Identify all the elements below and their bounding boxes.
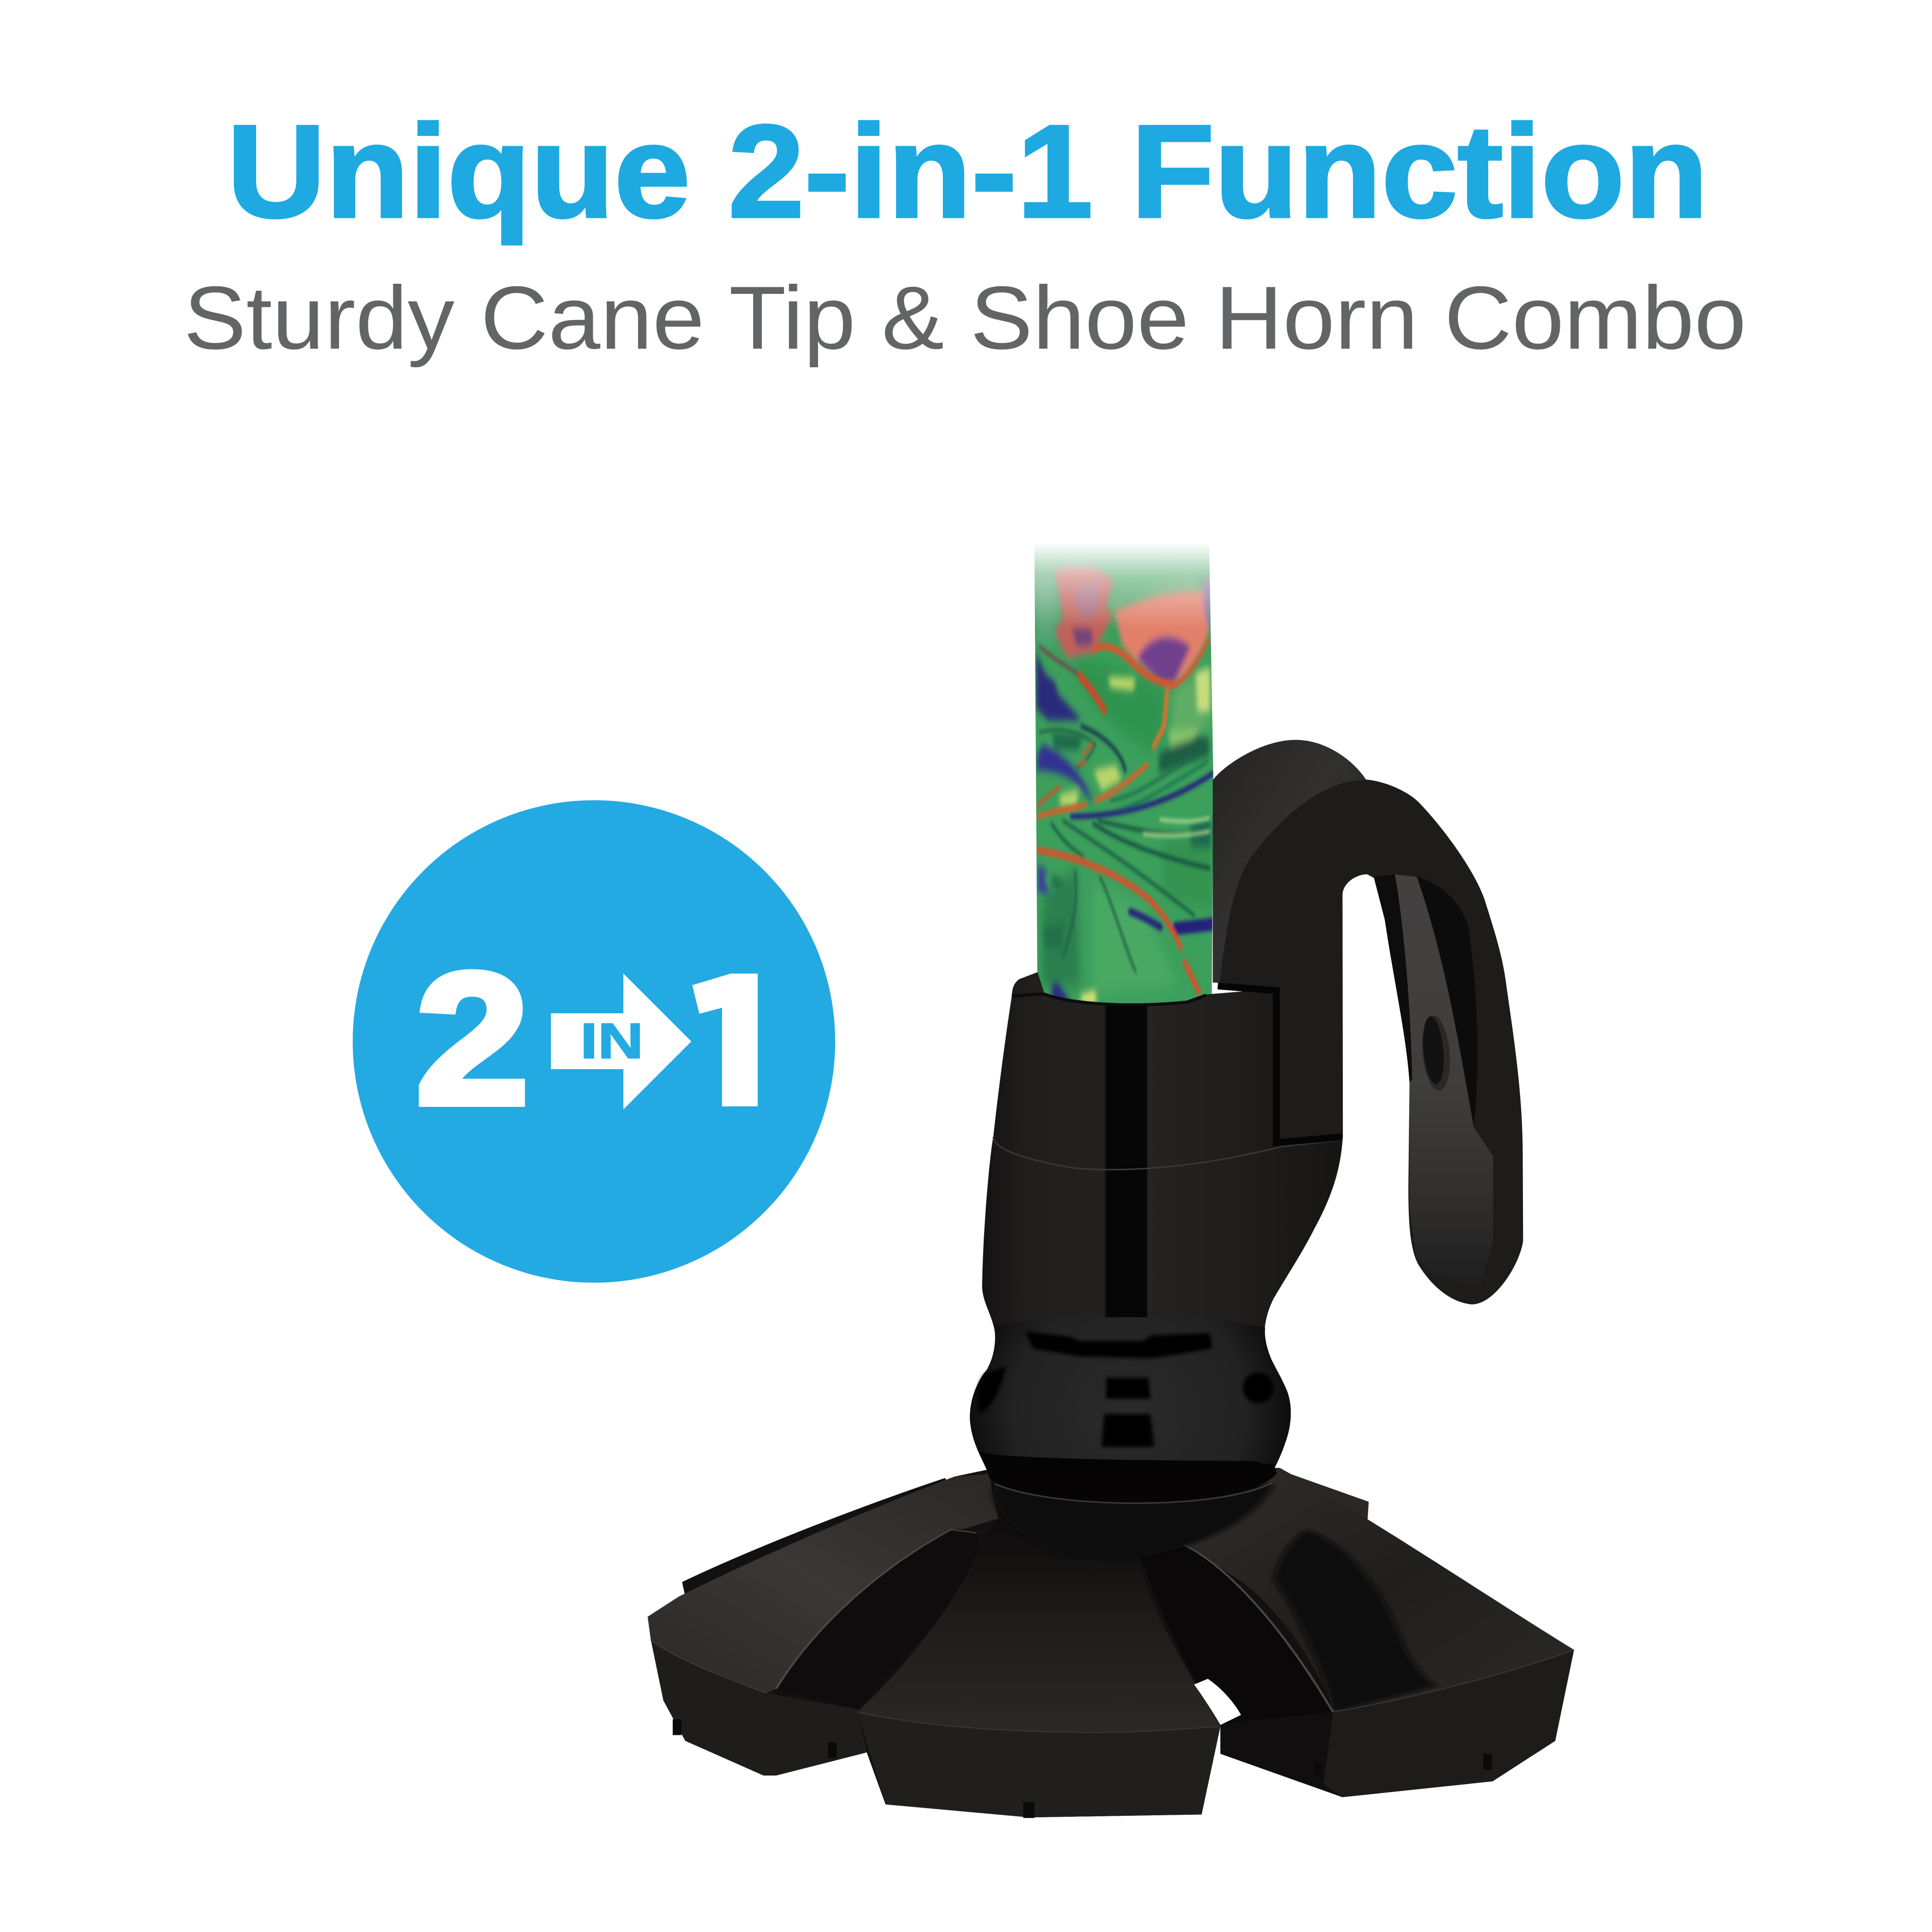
badge: 2 in 1: [353, 800, 835, 1283]
badge numeral 2: 2: [416, 934, 529, 1143]
right foot side: [1324, 1650, 1574, 1797]
dome below neck: [993, 1484, 1273, 1559]
body seam: [993, 1137, 1342, 1170]
dark fill between feet: [1221, 1712, 1342, 1797]
left foot side: [651, 1640, 867, 1776]
collar groove: [1218, 986, 1342, 1143]
hook rear wall: [1213, 740, 1366, 983]
red and orange stems: [1093, 647, 1174, 685]
light patches: [1060, 676, 1136, 806]
right recess: [1139, 1542, 1333, 1732]
hook dark channel: [1417, 877, 1478, 1128]
back right foot: [1273, 1468, 1369, 1521]
flower left: [1054, 565, 1113, 659]
foot notches: [673, 1719, 1492, 1818]
base with feet: [648, 1464, 1574, 1818]
badge numeral 1: 1: [672, 931, 779, 1148]
foot top edges: [651, 1640, 1574, 1733]
back left foot: [682, 1478, 957, 1596]
hook grey panel: [1395, 874, 1493, 1287]
ball lower shadow: [980, 1452, 1275, 1505]
cane shaft with floral print: [1031, 543, 1218, 1007]
gap behind feet: [1194, 1679, 1241, 1725]
fine lines: [1098, 821, 1209, 834]
gloss highlights: [977, 1331, 1273, 1447]
cane tip body: [970, 972, 1343, 1470]
shaft top fade: [1026, 533, 1220, 629]
neck ring: [986, 1464, 1277, 1503]
ball collar: [970, 1317, 1291, 1470]
dark leaf: [1159, 735, 1209, 774]
center foot side: [857, 1712, 1221, 1817]
navy leaves: [1036, 653, 1082, 720]
left recess: [776, 1529, 979, 1709]
title: Unique 2-in-1 Function: [227, 98, 1708, 246]
left recess edge: [776, 1530, 976, 1689]
base top: [648, 1468, 1574, 1817]
arrow: [551, 974, 691, 1109]
center foot top: [857, 1518, 1221, 1733]
shoe horn hook: [1012, 740, 1523, 1305]
product photo: cane tip with shoe horn: [648, 533, 1574, 1818]
collar front rim: [1012, 994, 1206, 1005]
hook outline: [1213, 740, 1523, 1305]
left foot top: [648, 1474, 998, 1693]
right glossy patch: [1273, 1530, 1436, 1712]
tip body and hook: [970, 740, 1523, 1505]
right foot top: [1180, 1468, 1574, 1712]
subtitle: Sturdy Cane Tip & Shoe Horn Combo: [184, 268, 1746, 368]
right recess edge: [1139, 1542, 1333, 1712]
badge circle: [353, 800, 835, 1283]
flower right: [1114, 591, 1209, 685]
hook inner dark strip: [1374, 874, 1412, 1083]
hook hole: [1419, 1014, 1453, 1092]
navy stroke: [1072, 774, 1213, 817]
arrow label IN: IN: [580, 1013, 643, 1069]
